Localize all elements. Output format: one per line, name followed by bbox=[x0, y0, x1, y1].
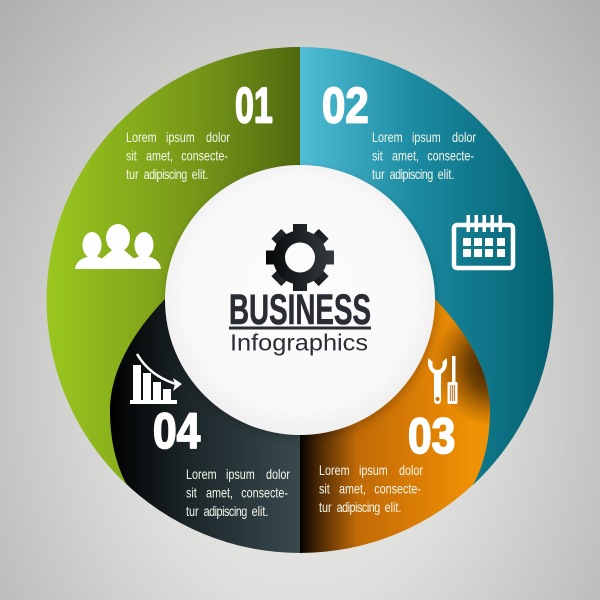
icon: calendar bbox=[454, 215, 513, 268]
number 03: 03 bbox=[408, 408, 455, 464]
text block 02: consecte- bbox=[427, 148, 474, 164]
orange edge shading bbox=[436, 322, 490, 424]
text block 02: tur bbox=[372, 167, 385, 182]
text block 04: Lorem bbox=[186, 467, 217, 482]
text block 04: ipsum bbox=[226, 467, 255, 482]
text block 04 bbox=[186, 467, 290, 519]
subtitle: Infographics: Infographics bbox=[230, 330, 368, 356]
panel: 02 teal bbox=[300, 47, 553, 485]
text block 03: elit. bbox=[385, 500, 401, 515]
text block 02: ipsum bbox=[412, 130, 441, 145]
text block 03: tur bbox=[319, 500, 332, 515]
text block 02: amet, bbox=[392, 148, 419, 164]
text block 03: consecte- bbox=[374, 481, 421, 497]
text block 01 bbox=[126, 130, 230, 182]
text block 02: sit bbox=[372, 148, 383, 164]
text block 02: dolor bbox=[452, 130, 476, 145]
text block 03: Lorem bbox=[319, 463, 350, 478]
white disc bbox=[165, 165, 435, 435]
text block 02: elit. bbox=[438, 167, 454, 182]
text block 03: sit bbox=[319, 481, 330, 497]
number 04: 04 bbox=[153, 403, 200, 459]
panel: 01 green bbox=[47, 47, 300, 485]
text block 01: ipsum bbox=[166, 130, 195, 145]
text block 04: tur bbox=[186, 504, 199, 519]
text block 01: elit. bbox=[192, 167, 208, 182]
green segment bbox=[47, 47, 300, 485]
number 02: 02 bbox=[322, 77, 369, 133]
text block 01: adipiscing bbox=[144, 167, 187, 182]
text block 04: adipiscing bbox=[204, 504, 247, 519]
orange segment bbox=[300, 299, 490, 553]
text block 04: consecte- bbox=[241, 485, 288, 501]
panel: 03 orange bbox=[300, 299, 490, 553]
text block 03 bbox=[319, 463, 423, 515]
text block 04: sit bbox=[186, 485, 197, 501]
icon: gear bbox=[266, 224, 334, 291]
text block 01: dolor bbox=[206, 130, 230, 145]
icon: people bbox=[75, 224, 161, 269]
text block 02: Lorem bbox=[372, 130, 403, 145]
number 01: 01 bbox=[235, 78, 273, 134]
text block 01: amet, bbox=[146, 148, 173, 164]
text block 04: elit. bbox=[252, 504, 268, 519]
text block 01: sit bbox=[126, 148, 137, 164]
dark segment bbox=[110, 299, 300, 553]
text block 01: tur bbox=[126, 167, 139, 182]
text block 03: dolor bbox=[399, 463, 423, 478]
text block 04: amet, bbox=[206, 485, 233, 501]
title rule bbox=[229, 326, 371, 330]
panel: center circle bbox=[165, 165, 435, 435]
teal segment bbox=[300, 47, 553, 485]
text block 03: amet, bbox=[339, 481, 366, 497]
panel: 04 dark bbox=[110, 299, 300, 553]
text block 02 bbox=[372, 130, 476, 182]
text block 01: consecte- bbox=[181, 148, 228, 164]
text block 01: Lorem bbox=[126, 130, 157, 145]
text block 02: adipiscing bbox=[390, 167, 433, 182]
icon: wrench and screwdriver bbox=[428, 356, 458, 404]
text block 03: ipsum bbox=[359, 463, 388, 478]
icon: falling bar chart bbox=[130, 354, 182, 404]
text block 03: adipiscing bbox=[337, 500, 380, 515]
text block 04: dolor bbox=[266, 467, 290, 482]
title: Business: BUSINESS bbox=[229, 286, 371, 334]
